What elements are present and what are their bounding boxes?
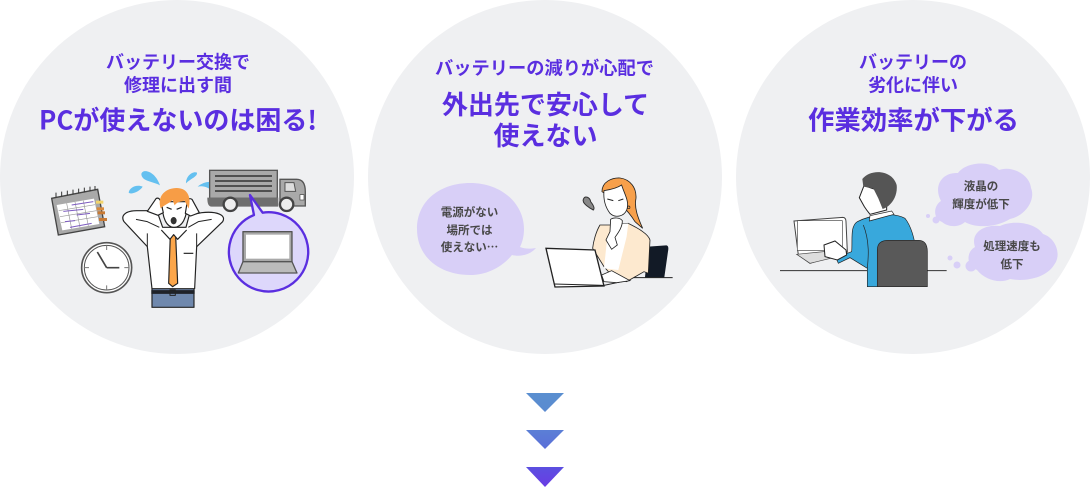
illustration: troubled man [52, 171, 224, 307]
callout: no power source: 場所では [446, 222, 493, 238]
figure: man [123, 188, 224, 307]
panel: PC unavailable during repair [0, 0, 354, 354]
icon: delivery truck [207, 170, 305, 211]
heading: PC unavailable: PCが使えないのは困る! [39, 100, 317, 138]
callout: no power source: 電源がない [441, 204, 498, 220]
icon: calendar [52, 186, 107, 235]
callout: no power source [417, 183, 536, 275]
callout: laptop bubble [229, 195, 308, 292]
panel: anxious about battery [368, 0, 722, 354]
illustration: man at laptop [780, 172, 947, 287]
illustration: worried woman [546, 178, 673, 287]
heading: battery: バッテリーの [859, 48, 967, 74]
callout: processing speed: 処理速度も [983, 238, 1041, 254]
heading: during repair: 修理に出す間 [124, 72, 232, 98]
heading: worried about battery: バッテリーの減りが心配で [435, 54, 654, 80]
arrow: down 3 [526, 467, 564, 487]
heading: cannot use: 使えない [493, 116, 598, 153]
callout: no power source: 使えない… [441, 239, 498, 255]
callout: screen brightness [926, 164, 1032, 226]
arrow: down 1 [526, 393, 564, 412]
callout: processing speed [948, 223, 1058, 281]
heading: battery replacement: バッテリー交換で [106, 48, 250, 74]
heading: cannot use outside: 外出先で安心して [442, 85, 649, 122]
icon: clock [82, 243, 132, 293]
panel: lower work efficiency [736, 0, 1090, 354]
heading: lower efficiency: 作業効率が下がる [808, 98, 1019, 138]
arrow: down 2 [526, 430, 564, 449]
callout: processing speed: 低下 [1000, 256, 1024, 272]
icon: sweat drops [129, 171, 215, 193]
icon: laptop [238, 232, 297, 273]
heading: deterioration: 劣化に伴い [868, 72, 958, 98]
callout: screen brightness: 液晶の [964, 178, 998, 194]
callout: screen brightness: 輝度が低下 [952, 196, 1010, 212]
